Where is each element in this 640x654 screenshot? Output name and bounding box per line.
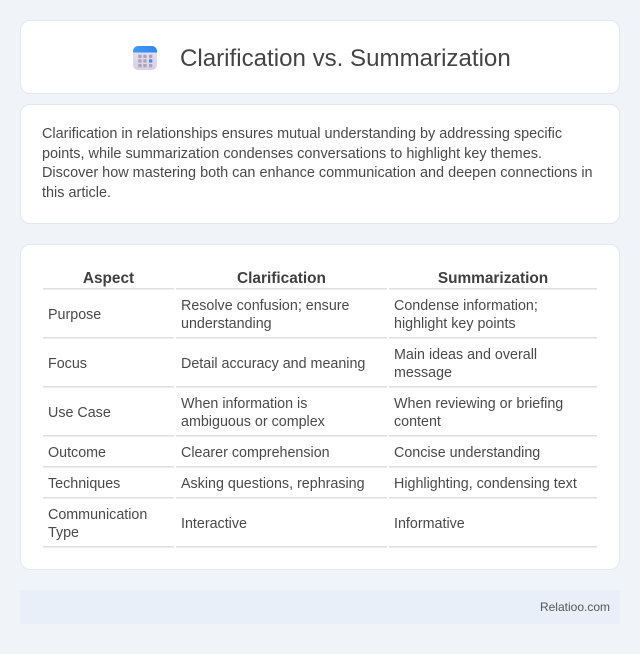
Outcome clarification: Clearer comprehension	[181, 445, 330, 461]
Focus summarization: Main ideas and overall	[394, 347, 537, 363]
Purpose clarification	[181, 298, 349, 332]
Use Case summarization	[394, 396, 563, 430]
table panel	[20, 244, 620, 570]
Purpose clarification: Resolve confusion; ensure	[181, 298, 349, 314]
Communication Type clarification: Interactive	[181, 516, 247, 532]
row: Communication Type: Communication	[48, 507, 147, 523]
Purpose summarization: highlight key points	[394, 316, 516, 332]
Focus clarification: Detail accuracy and meaning	[181, 356, 365, 372]
intro text: this article.	[42, 184, 111, 200]
icon: calendar	[133, 46, 157, 70]
column heading: Aspect: Aspect	[83, 270, 134, 287]
column heading: Clarification: Clarification	[237, 270, 326, 287]
footer bar	[20, 590, 620, 624]
Purpose summarization: Condense information;	[394, 298, 538, 314]
intro text: Discover how mastering both can enhance communication and deepen connections in	[42, 165, 593, 181]
Purpose summarization	[394, 298, 538, 332]
Focus summarization	[394, 347, 537, 381]
row: Communication Type: Type	[48, 525, 79, 541]
row: Communication Type	[48, 507, 147, 541]
Use Case clarification: When information is	[181, 396, 307, 412]
Use Case summarization: When reviewing or briefing	[394, 396, 563, 412]
row: Focus: Focus	[48, 356, 87, 372]
intro text: points, while summarization condenses conversations to highlight key themes.	[42, 146, 542, 162]
Communication Type summarization: Informative	[394, 516, 465, 532]
Techniques clarification: Asking questions, rephrasing	[181, 476, 365, 492]
row: Use Case: Use Case	[48, 405, 111, 421]
row: Techniques: Techniques	[48, 476, 120, 492]
Use Case clarification: ambiguous or complex	[181, 414, 325, 430]
column heading: Summarization: Summarization	[438, 270, 548, 287]
row: Outcome: Outcome	[48, 445, 106, 461]
Use Case clarification	[181, 396, 325, 430]
Use Case summarization: content	[394, 414, 441, 430]
intro panel	[20, 104, 620, 224]
header panel	[20, 20, 620, 94]
Focus summarization: message	[394, 365, 452, 381]
Techniques summarization: Highlighting, condensing text	[394, 476, 577, 492]
intro text: Clarification in relationships ensures mutual understanding by addressing specific	[42, 126, 562, 142]
Outcome summarization: Concise understanding	[394, 445, 540, 461]
Purpose clarification: understanding	[181, 316, 272, 332]
intro text	[42, 126, 593, 200]
row: Purpose: Purpose	[48, 307, 101, 323]
title: Clarification vs. Summarization	[180, 45, 511, 72]
footer credit: Relatioo.com	[540, 600, 610, 614]
